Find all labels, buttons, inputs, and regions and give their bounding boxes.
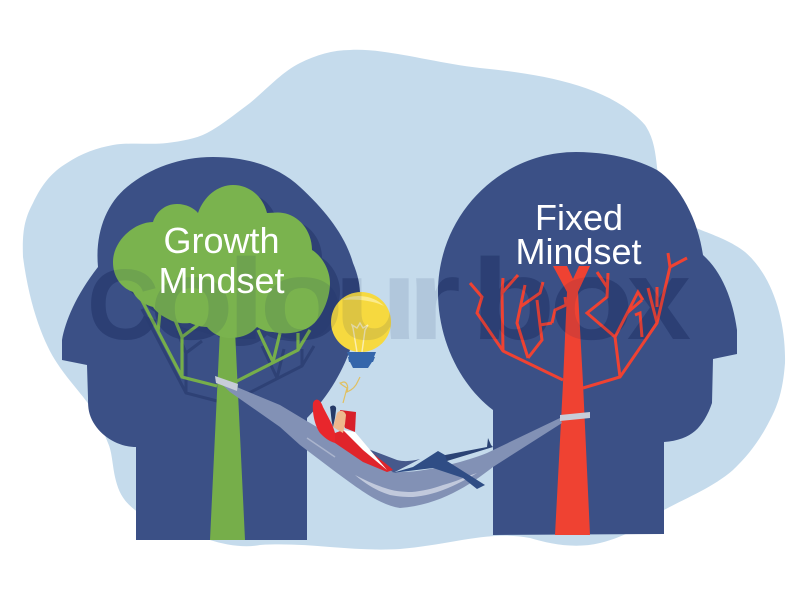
hammock body — [215, 378, 562, 508]
infographic: growth vs fixed mindset — [22, 50, 785, 550]
hammock fold highlight — [355, 473, 477, 497]
watermark: olourbo — [150, 235, 634, 363]
jacket — [335, 430, 393, 472]
front leg — [392, 451, 485, 489]
watermark over the heads: C — [87, 249, 159, 361]
watermark over the heads: olourbo — [150, 235, 634, 363]
left strap — [215, 376, 238, 391]
hammock crease — [307, 438, 335, 457]
label: growth mindset: Growth — [163, 220, 280, 261]
hammock back rest — [313, 400, 335, 443]
background blob — [23, 50, 785, 550]
hammock back side — [368, 449, 420, 473]
label: fixed mindset second line: Mindset — [515, 231, 642, 272]
tree branches — [138, 293, 310, 386]
label: growth mindset second line: Mindset — [158, 260, 285, 301]
bulb highlight — [343, 296, 384, 306]
red trunk — [553, 266, 590, 535]
bulb base — [347, 352, 376, 368]
hammock — [215, 376, 590, 508]
idea squiggle — [340, 377, 360, 403]
left head silhouette — [62, 157, 360, 540]
man reclining in hammock — [313, 400, 493, 489]
label: fixed mindset: Fixed — [535, 197, 623, 238]
light bulb — [331, 292, 391, 403]
red branches — [470, 253, 687, 388]
fixed tree — [470, 253, 687, 535]
hair — [330, 406, 336, 427]
red book — [340, 410, 356, 432]
white shirt — [343, 430, 387, 470]
watermark over the heads: x — [627, 236, 691, 364]
head and hand — [333, 411, 346, 433]
right head silhouette — [438, 152, 737, 535]
watermark: C — [87, 249, 159, 361]
back leg — [440, 438, 493, 461]
tree crown — [113, 185, 330, 338]
tree trunk — [210, 330, 245, 540]
left tree shadow — [123, 193, 340, 402]
watermark over the heads — [91, 256, 690, 340]
bulb glass — [331, 292, 391, 352]
watermark: x — [627, 236, 691, 364]
right strap — [560, 412, 590, 421]
filament — [352, 323, 368, 352]
growth tree — [113, 185, 330, 540]
